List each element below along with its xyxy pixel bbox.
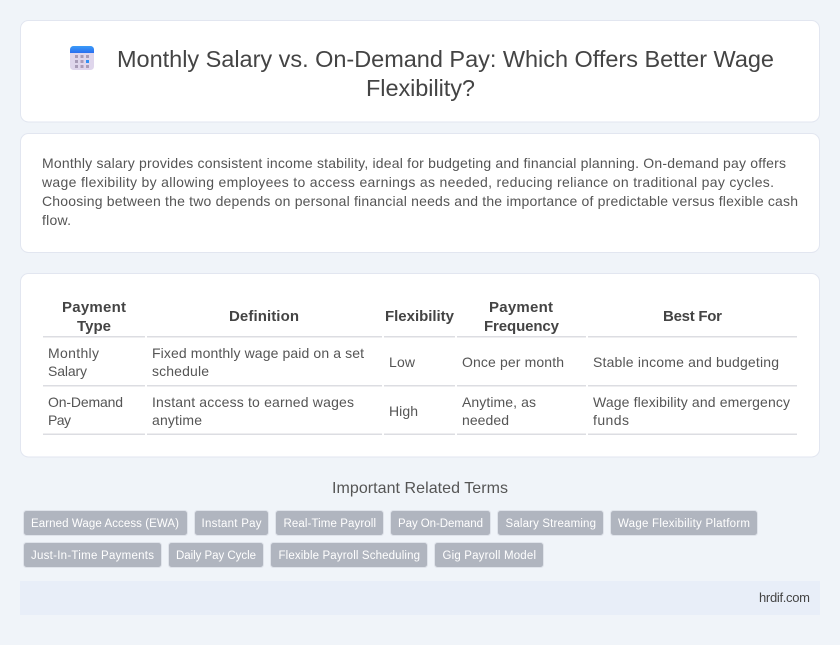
heading: related terms: Important Related Terms bbox=[332, 480, 508, 497]
text block: summary: flow. bbox=[42, 212, 71, 228]
table header row: Best For bbox=[663, 308, 722, 325]
table row: on-demand pay bbox=[48, 394, 790, 428]
tags: related terms bbox=[24, 510, 758, 568]
table row: on-demand pay: On-Demand bbox=[48, 394, 123, 410]
panel: comparison table bbox=[20, 274, 820, 457]
icon: calendar bbox=[70, 46, 94, 70]
table row: on-demand pay: Wage flexibility and emergency bbox=[593, 394, 790, 410]
tags: related terms: Wage Flexibility Platform bbox=[618, 518, 750, 530]
panel: summary paragraph bbox=[20, 134, 820, 252]
table header row: Flexibility bbox=[385, 308, 455, 325]
table row: monthly salary: Monthly bbox=[48, 345, 99, 361]
table row: monthly salary: Low bbox=[389, 354, 416, 370]
table row: on-demand pay: Instant access to earned wages bbox=[152, 394, 354, 410]
table row: monthly salary: Salary bbox=[48, 363, 87, 379]
table header row: Payment bbox=[489, 299, 553, 316]
panel: header bbox=[20, 20, 820, 122]
tags: related terms: Pay On-Demand bbox=[398, 518, 483, 530]
table header row: Frequency bbox=[484, 318, 560, 335]
tags: related terms: Salary Streaming bbox=[506, 518, 596, 530]
text block: summary: Monthly salary provides consistent income stability, ideal for budgeting and financial planning. On-demand pay offers bbox=[42, 155, 786, 171]
table header row bbox=[62, 299, 722, 335]
tags: related terms: Real-Time Payroll bbox=[284, 518, 376, 530]
tags: related terms: Flexible Payroll Scheduling bbox=[278, 550, 420, 562]
title: Flexibility? bbox=[366, 75, 475, 101]
tags: related terms: Daily Pay Cycle bbox=[176, 550, 256, 562]
table row: monthly salary: Fixed monthly wage paid on a set bbox=[152, 345, 364, 361]
title bbox=[117, 46, 774, 101]
text block: summary: wage flexibility by allowing employees to access earnings as needed, reducing reliance on traditional pay cycles. bbox=[41, 174, 774, 190]
text block: summary: Choosing between the two depends on personal financial needs and the importance of predictable versus flexible cash bbox=[42, 193, 798, 209]
tags: related terms: Just-In-Time Payments bbox=[31, 550, 154, 562]
table row: on-demand pay: anytime bbox=[152, 412, 202, 428]
tags: related terms: Gig Payroll Model bbox=[442, 550, 536, 562]
table row: on-demand pay: funds bbox=[593, 412, 629, 428]
footer: hrdif.com bbox=[759, 590, 810, 605]
tags: related terms: Instant Pay bbox=[202, 518, 262, 530]
table row: monthly salary bbox=[48, 345, 779, 379]
table header row: Definition bbox=[229, 308, 299, 325]
footer bbox=[20, 581, 820, 615]
table row: on-demand pay: Anytime, as bbox=[462, 394, 536, 410]
table header row: Payment bbox=[62, 299, 126, 316]
title: Monthly Salary vs. On-Demand Pay: Which Offers Better Wage bbox=[117, 46, 774, 72]
table row: monthly salary: Stable income and budgeting bbox=[593, 354, 779, 370]
text block: summary bbox=[41, 155, 798, 228]
table row: on-demand pay: needed bbox=[462, 412, 509, 428]
table row: monthly salary: Once per month bbox=[462, 354, 564, 370]
table row: on-demand pay: High bbox=[389, 403, 418, 419]
table row: on-demand pay: Pay bbox=[48, 412, 71, 428]
table row: monthly salary: schedule bbox=[152, 363, 209, 379]
tags: related terms: Earned Wage Access (EWA) bbox=[31, 518, 179, 530]
table header row: Type bbox=[77, 318, 111, 335]
